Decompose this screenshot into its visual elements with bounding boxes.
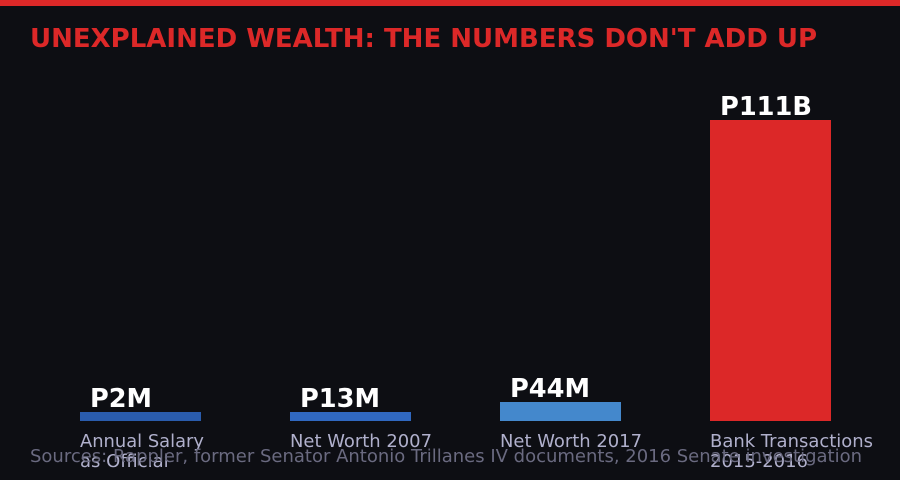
bar: net worth 2007: P13M (300, 384, 380, 414)
bar: net worth 2017 (500, 374, 642, 452)
bar: annual salary (80, 384, 204, 472)
bar: bank transactions: P111B (720, 92, 812, 122)
bar: annual salary: Annual Salary (80, 431, 204, 452)
bar: annual salary: P2M (90, 384, 152, 414)
bar: net worth 2017: Net Worth 2017 (500, 431, 642, 452)
bar: net worth 2007 (290, 384, 432, 452)
bar: bank transactions: 2015-2016 (710, 451, 808, 472)
bar: annual salary: as Official (80, 451, 169, 472)
bar: net worth 2007: Net Worth 2007 (290, 431, 432, 452)
title: UNEXPLAINED WEALTH: THE NUMBERS DON'T ADD UP (30, 24, 817, 54)
top accent bar (0, 0, 900, 6)
bar chart (80, 92, 873, 472)
bar: net worth 2017: P44M (510, 374, 590, 404)
source note: Sources: Rappler, former Senator Antonio Trillanes IV documents, 2016 Senate investigation (30, 446, 862, 467)
bar: bank transactions: Bank Transactions (710, 431, 873, 452)
bar: bank transactions (710, 92, 873, 472)
